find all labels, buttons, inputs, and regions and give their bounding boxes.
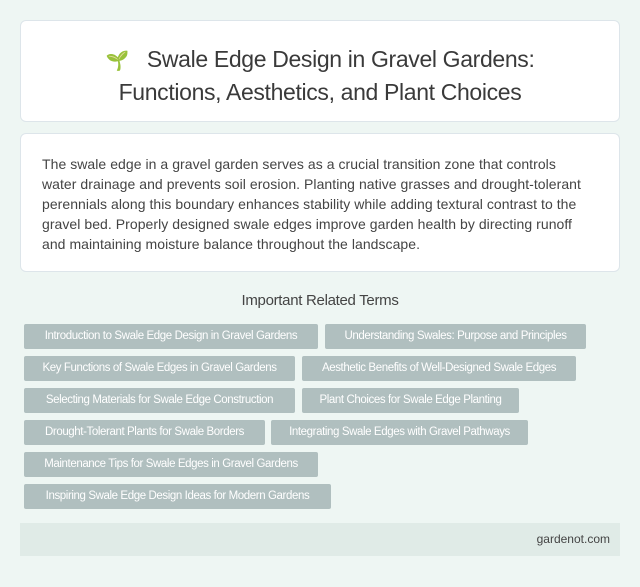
footer xyxy=(20,523,620,556)
tag xyxy=(24,324,318,349)
header card xyxy=(20,20,620,122)
tag: Selecting Materials for Swale Edge Construction xyxy=(46,394,273,406)
description card xyxy=(20,133,620,272)
description text: perennials along this boundary enhances stability while adding textural contrast to the xyxy=(42,196,576,212)
tag: Key Functions of Swale Edges in Gravel Gardens xyxy=(42,362,277,374)
tag: Understanding Swales: Purpose and Principles xyxy=(344,330,567,342)
tag xyxy=(302,388,519,413)
description text xyxy=(42,156,581,252)
footer source text: gardenot.com xyxy=(537,532,610,546)
tag: Plant Choices for Swale Edge Planting xyxy=(319,394,502,406)
tag xyxy=(325,324,586,349)
tag xyxy=(302,356,576,381)
section heading: Important Related Terms xyxy=(241,292,399,309)
tags list xyxy=(24,324,586,509)
tag xyxy=(24,452,318,477)
tag: Integrating Swale Edges with Gravel Pathways xyxy=(289,426,510,438)
title xyxy=(106,46,534,105)
title: 🌱 Swale Edge Design in Gravel Gardens: xyxy=(106,46,534,72)
tag xyxy=(24,420,265,445)
tag: Inspiring Swale Edge Design Ideas for Modern Gardens xyxy=(46,490,309,502)
tag xyxy=(24,356,295,381)
tag xyxy=(271,420,528,445)
description text: and maintaining moisture balance throughout the landscape. xyxy=(42,236,420,252)
description text: water drainage and prevents soil erosion. Planting native grasses and drought-tolerant xyxy=(42,176,581,192)
title: Functions, Aesthetics, and Plant Choices xyxy=(119,79,521,105)
description text: gravel bed. Properly designed swale edges improve garden health by directing runoff xyxy=(42,216,572,232)
tag xyxy=(24,388,295,413)
tag: Introduction to Swale Edge Design in Gravel Gardens xyxy=(45,330,297,342)
description text: The swale edge in a gravel garden serves as a crucial transition zone that controls xyxy=(42,156,556,172)
tag xyxy=(24,484,331,509)
tag: Drought-Tolerant Plants for Swale Borders xyxy=(45,426,244,438)
tag: Maintenance Tips for Swale Edges in Gravel Gardens xyxy=(44,458,298,470)
tag: Aesthetic Benefits of Well-Designed Swale Edges xyxy=(322,362,556,374)
